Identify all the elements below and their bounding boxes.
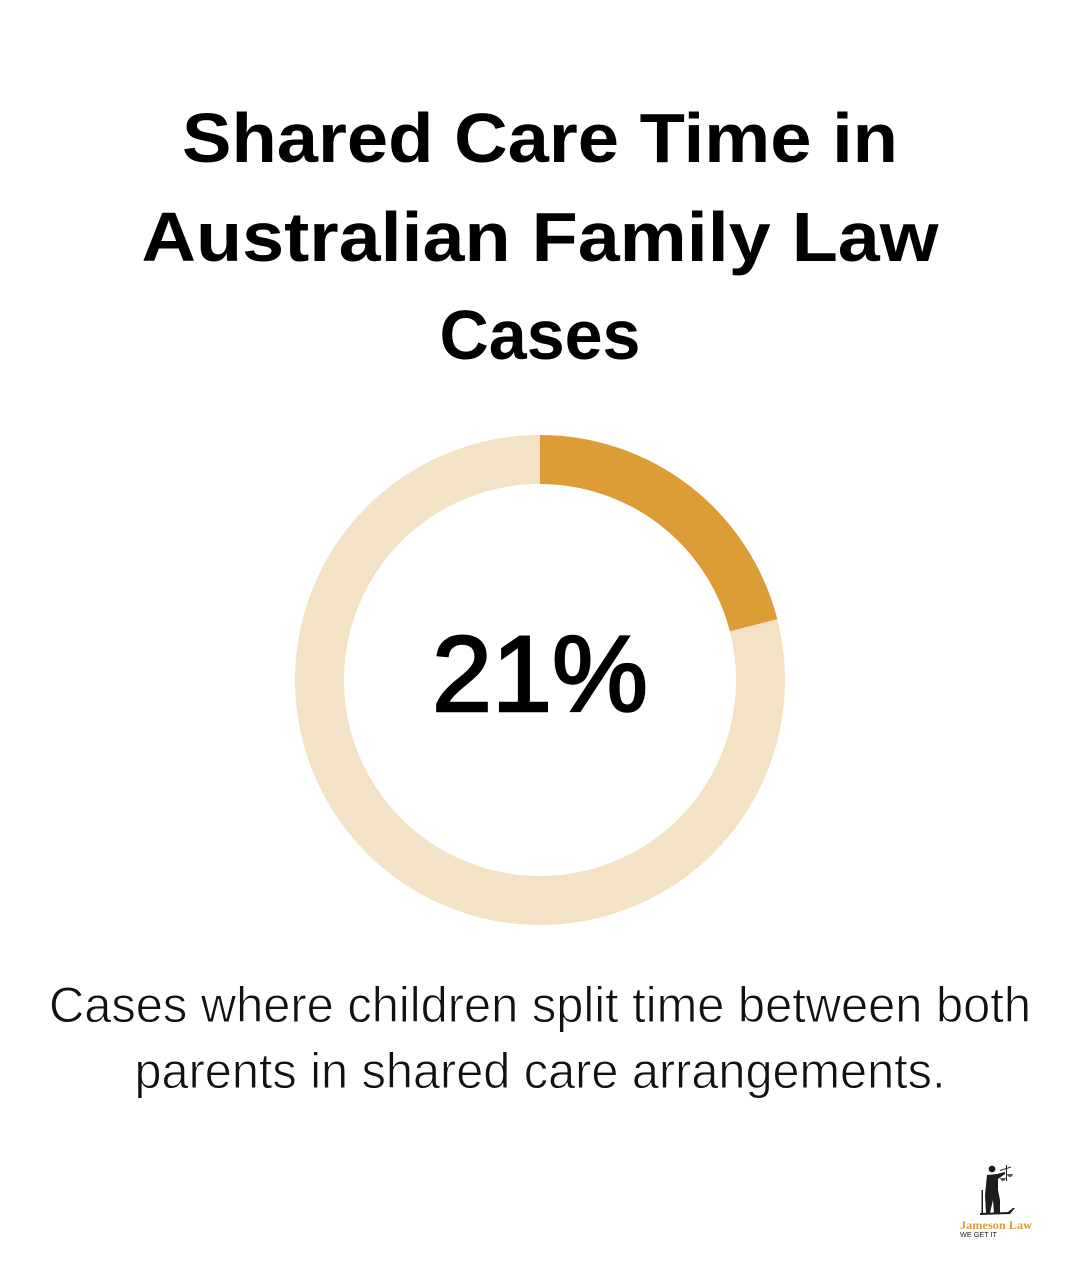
caption: parents in shared care arrangements. — [134, 1043, 946, 1099]
title — [142, 99, 939, 374]
logo: Jameson Law — [960, 1165, 1033, 1239]
highlighted segment: 21% — [540, 459, 754, 625]
caption — [49, 977, 1031, 1099]
icon: lady justice — [980, 1165, 1015, 1215]
tagline: WE GET IT — [960, 1230, 997, 1239]
brand name: Jameson Law — [960, 1220, 1033, 1232]
caption: Cases where children split time between both — [49, 977, 1031, 1033]
title: Australian Family Law — [142, 198, 939, 276]
title: Cases — [440, 296, 640, 374]
donut chart: 21% — [320, 459, 760, 900]
title: Shared Care Time in — [182, 99, 898, 177]
center value: 21% — [432, 613, 648, 734]
